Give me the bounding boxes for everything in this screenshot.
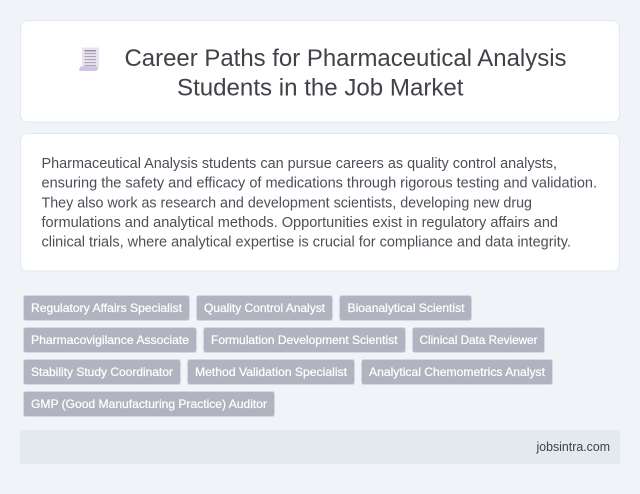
tag: Stability Study Coordinator: Stability Study Coordinator [31,365,173,379]
tag: Method Validation Specialist [188,360,354,384]
tag: Formulation Development Scientist: Formulation Development Scientist [211,333,398,347]
text block: description: Pharmaceutical Analysis students can pursue careers as quality control analysts, [42,156,557,172]
tag: Regulatory Affairs Specialist: Regulatory Affairs Specialist [31,301,183,315]
panel: description [20,134,620,271]
tag: Stability Study Coordinator [24,360,180,384]
tag: GMP (Good Manufacturing Practice) Auditor [24,392,274,416]
tag: Quality Control Analyst [196,296,332,320]
tag: Method Validation Specialist: Method Validation Specialist [195,365,348,379]
text block: description: formulations and analytical methods. Opportunities exist in regulatory affairs and [42,215,558,231]
panel: career tags [24,296,552,416]
text block: description: They also work as research and development scientists, developing new drug [42,196,532,212]
footer bar [20,430,620,464]
tag: Clinical Data Reviewer [412,328,544,352]
text block: description [42,156,597,250]
text block: description: ensuring the safety and efficacy of medications through rigorous testing and validation. [42,176,597,192]
tag: Quality Control Analyst: Quality Control Analyst [204,301,326,315]
tag: Formulation Development Scientist [204,328,406,352]
tag: Regulatory Affairs Specialist [24,296,190,320]
tag: Pharmacovigilance Associate: Pharmacovigilance Associate [31,333,189,347]
tag: GMP (Good Manufacturing Practice) Auditor: GMP (Good Manufacturing Practice) Auditor [31,397,267,411]
panel: title header [20,20,620,122]
tag: Bioanalytical Scientist: Bioanalytical Scientist [348,301,465,315]
title [124,45,566,102]
tag: Bioanalytical Scientist [340,296,472,320]
tag: Clinical Data Reviewer: Clinical Data Reviewer [420,333,538,347]
title: Career Paths for Pharmaceutical Analysis [124,45,566,72]
tag: Analytical Chemometrics Analyst: Analytical Chemometrics Analyst [369,365,546,379]
title: Students in the Job Market [177,74,464,102]
icon: pharmaceutical report document [79,48,99,71]
footer text: source: jobsintra.com [536,440,610,454]
text block: description: clinical trials, where analytical expertise is crucial for compliance and data integrity. [42,234,571,250]
tag: Pharmacovigilance Associate [24,328,196,352]
tag: Analytical Chemometrics Analyst [362,360,552,384]
